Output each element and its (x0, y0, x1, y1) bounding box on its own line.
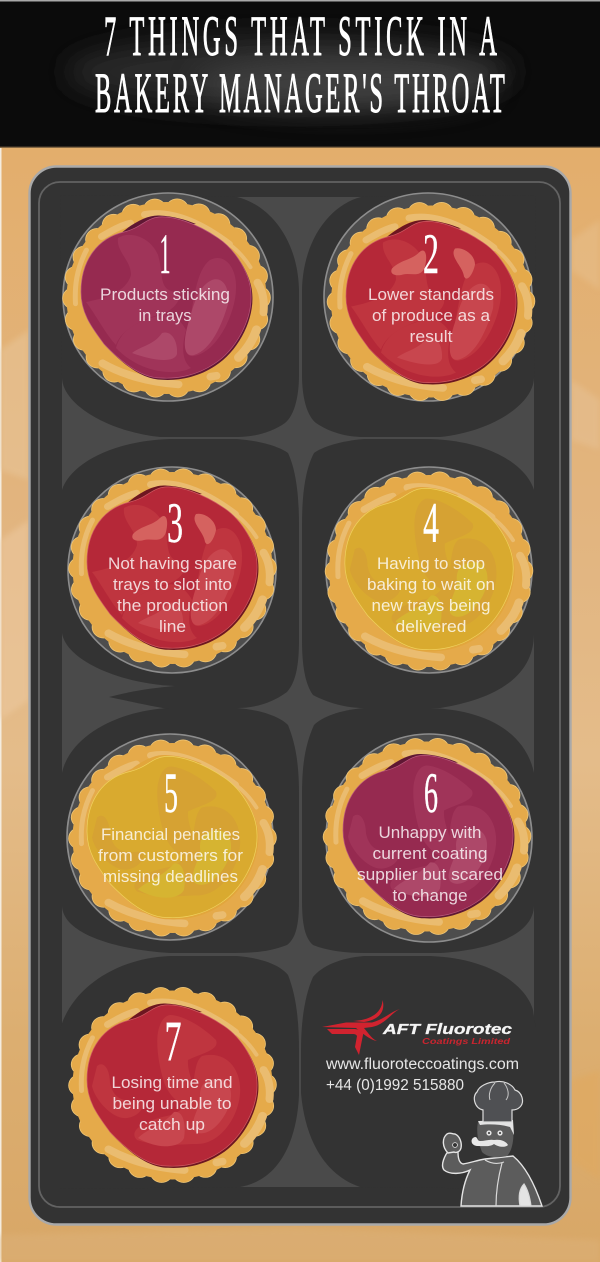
caption 3 (108, 555, 237, 636)
tart 6 (326, 734, 532, 942)
pastry crust (72, 743, 272, 933)
logo subtitle: Coatings Limited (422, 1036, 511, 1046)
tart 7 (72, 990, 272, 1180)
dish ring (324, 193, 532, 401)
caption 6: current coating (372, 845, 488, 863)
caption 3: Not having spare (108, 555, 237, 573)
caption 3: trays to slot into (113, 576, 232, 594)
caption 5: missing deadlines (103, 868, 238, 886)
caption 7 (112, 1074, 232, 1134)
chef hat (474, 1081, 522, 1122)
jam filling (343, 754, 514, 918)
caption 4 (367, 555, 495, 636)
caption 7: Losing time and (112, 1074, 232, 1092)
title: BAKERY MANAGER'S THROAT (95, 63, 505, 125)
dish ring (326, 734, 532, 942)
caption 6: Unhappy with (378, 824, 482, 842)
logo wordmark: AFT Fluorotec (382, 1021, 513, 1038)
jam filling (87, 1003, 258, 1168)
caption 5: Financial penalties (101, 826, 240, 844)
chef head (477, 1122, 513, 1157)
website: www.fluoroteccoatings.com (325, 1056, 519, 1073)
caption 1 (100, 286, 230, 325)
jam filling (81, 215, 252, 380)
chef mascot (443, 1081, 542, 1206)
chef eyes (486, 1130, 492, 1136)
tart 6: 6 (424, 762, 438, 825)
caption 3: line (159, 618, 186, 636)
title (95, 6, 505, 125)
number 4: 4 (423, 492, 439, 555)
pastry crust (72, 990, 272, 1180)
tart 2 (324, 193, 532, 401)
tart 1 (63, 193, 273, 401)
logo swoosh (322, 1000, 400, 1055)
caption 3: the production (117, 597, 228, 615)
caption 2 (368, 286, 494, 346)
header band (0, 0, 600, 148)
chef body (443, 1150, 542, 1206)
number 7: 7 (164, 1010, 182, 1073)
chef moustache (472, 1137, 508, 1147)
number 2: 2 (423, 223, 439, 286)
caption 4: new trays being (372, 597, 490, 615)
tart 3 (68, 467, 276, 673)
pastry crust (66, 202, 266, 394)
pastry crust (331, 206, 531, 398)
jam filling (87, 485, 258, 650)
caption 5 (98, 826, 244, 886)
caption 2: of produce as a (372, 307, 491, 325)
chef coat details (485, 1160, 531, 1206)
caption 4: baking to wait on (367, 576, 495, 594)
phone: +44 (0)1992 515880 (326, 1077, 464, 1094)
caption 4: delivered (396, 618, 466, 636)
dish ring (326, 467, 532, 673)
caption 4: Having to stop (377, 555, 485, 573)
caption 6 (357, 824, 503, 905)
pastry crust (329, 475, 529, 667)
caption 1: Products sticking (100, 286, 230, 304)
caption 1: in trays (138, 307, 192, 325)
caption 6: supplier but scared (357, 866, 503, 884)
caption 2: result (410, 328, 453, 346)
caption 5: from customers for (98, 847, 244, 865)
caption 2: Lower standards (368, 286, 494, 304)
number 3: 3 (167, 492, 183, 555)
title: 7 THINGS THAT STICK IN A (104, 6, 497, 68)
caption 7: catch up (139, 1116, 205, 1134)
tart 5 (67, 734, 273, 940)
custard filling (345, 487, 515, 651)
caption 6: to change (392, 887, 468, 905)
tart 5: 5 (164, 762, 178, 825)
tray wells (60, 195, 536, 1189)
caption 7: being unable to (112, 1095, 232, 1113)
pastry crust (327, 742, 527, 932)
custard filling (87, 755, 258, 919)
dish ring (67, 734, 273, 940)
dish ring (63, 193, 273, 401)
tart 1: 1 (160, 223, 170, 286)
tart 4 (326, 467, 532, 673)
pastry crust (72, 472, 272, 664)
logo: AFT Fluorotec (322, 1000, 513, 1055)
chef hand (443, 1133, 461, 1153)
baking tray (30, 166, 570, 1224)
jam filling (346, 220, 517, 384)
dish ring (68, 467, 276, 673)
